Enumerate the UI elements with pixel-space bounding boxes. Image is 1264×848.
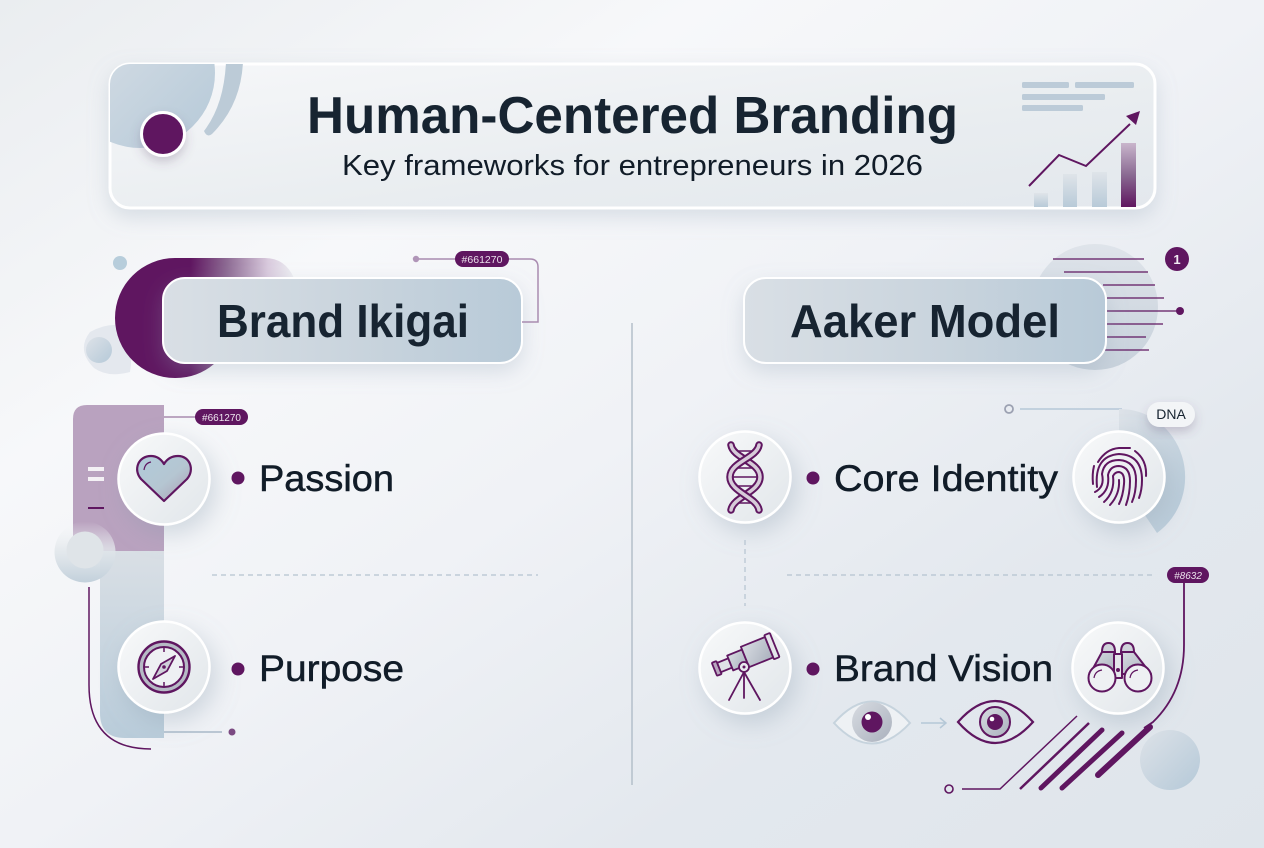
title panel — [104, 62, 1162, 224]
dashed connector: vertical — [744, 540, 746, 606]
title corner decoration — [110, 64, 243, 148]
item: Purpose — [118, 622, 404, 712]
heading: Aaker Model — [744, 278, 1106, 363]
connector: curved left line — [89, 587, 151, 749]
item: Core Identity — [700, 432, 1059, 522]
title: Human-Centered Branding — [307, 87, 958, 145]
dashed divider: left — [212, 574, 538, 576]
item: Brand Vision: Brand Vision — [834, 648, 1053, 689]
heading: Aaker Model: Aaker Model — [790, 295, 1060, 347]
item: Purpose: Purpose — [259, 648, 404, 689]
callout: Vision hex tag and connector — [1144, 567, 1209, 728]
callout: Passion hex tag — [164, 409, 248, 425]
dashed divider: right — [787, 574, 1155, 576]
icon: heart — [118, 434, 210, 524]
heading: Brand Ikigai — [163, 278, 522, 363]
callout: Ikigai hex tag — [413, 251, 538, 322]
icon: fingerprint — [1074, 432, 1164, 522]
icon: DNA — [700, 432, 790, 522]
item: Passion: Passion — [259, 458, 394, 499]
item: Core Identity: Core Identity — [834, 458, 1059, 499]
left decor: blobs and crescent — [84, 256, 294, 378]
icon: compass — [118, 622, 210, 712]
callout: Vision hex tag and connector: #8632 — [1174, 571, 1202, 582]
crescent orb — [54, 522, 116, 582]
subtitle: Key frameworks for entrepreneurs in 2026 — [342, 150, 923, 182]
heading: Brand Ikigai: Brand Ikigai — [217, 295, 469, 347]
icon: binoculars — [1072, 622, 1164, 714]
callout: Ikigai hex tag: #661270 — [462, 254, 503, 266]
callout: DNA ring and tag: DNA — [1156, 406, 1186, 422]
item: Passion — [118, 434, 394, 524]
illustration: eye to eye transition — [834, 701, 1033, 744]
callout: Passion hex tag: #661270 — [202, 413, 241, 424]
icon: pale eye — [834, 702, 910, 744]
icon: telescope — [700, 622, 790, 714]
callout: DNA ring and tag — [1005, 402, 1195, 533]
decorative diagonal stripes — [945, 716, 1150, 793]
arrow — [921, 718, 946, 728]
item: Brand Vision — [700, 622, 1164, 714]
center divider — [631, 323, 633, 785]
badge: number 1: 1 — [1173, 252, 1181, 267]
connector: strip to dot — [164, 728, 236, 736]
decor: soft sphere — [1140, 730, 1200, 790]
icon: purple eye — [958, 701, 1033, 743]
icon: purple dot — [142, 112, 184, 156]
side strip — [54, 405, 164, 738]
right decor: striped circle — [1032, 244, 1184, 370]
badge: number 1 — [1165, 247, 1189, 271]
mini growth chart — [1022, 82, 1140, 207]
